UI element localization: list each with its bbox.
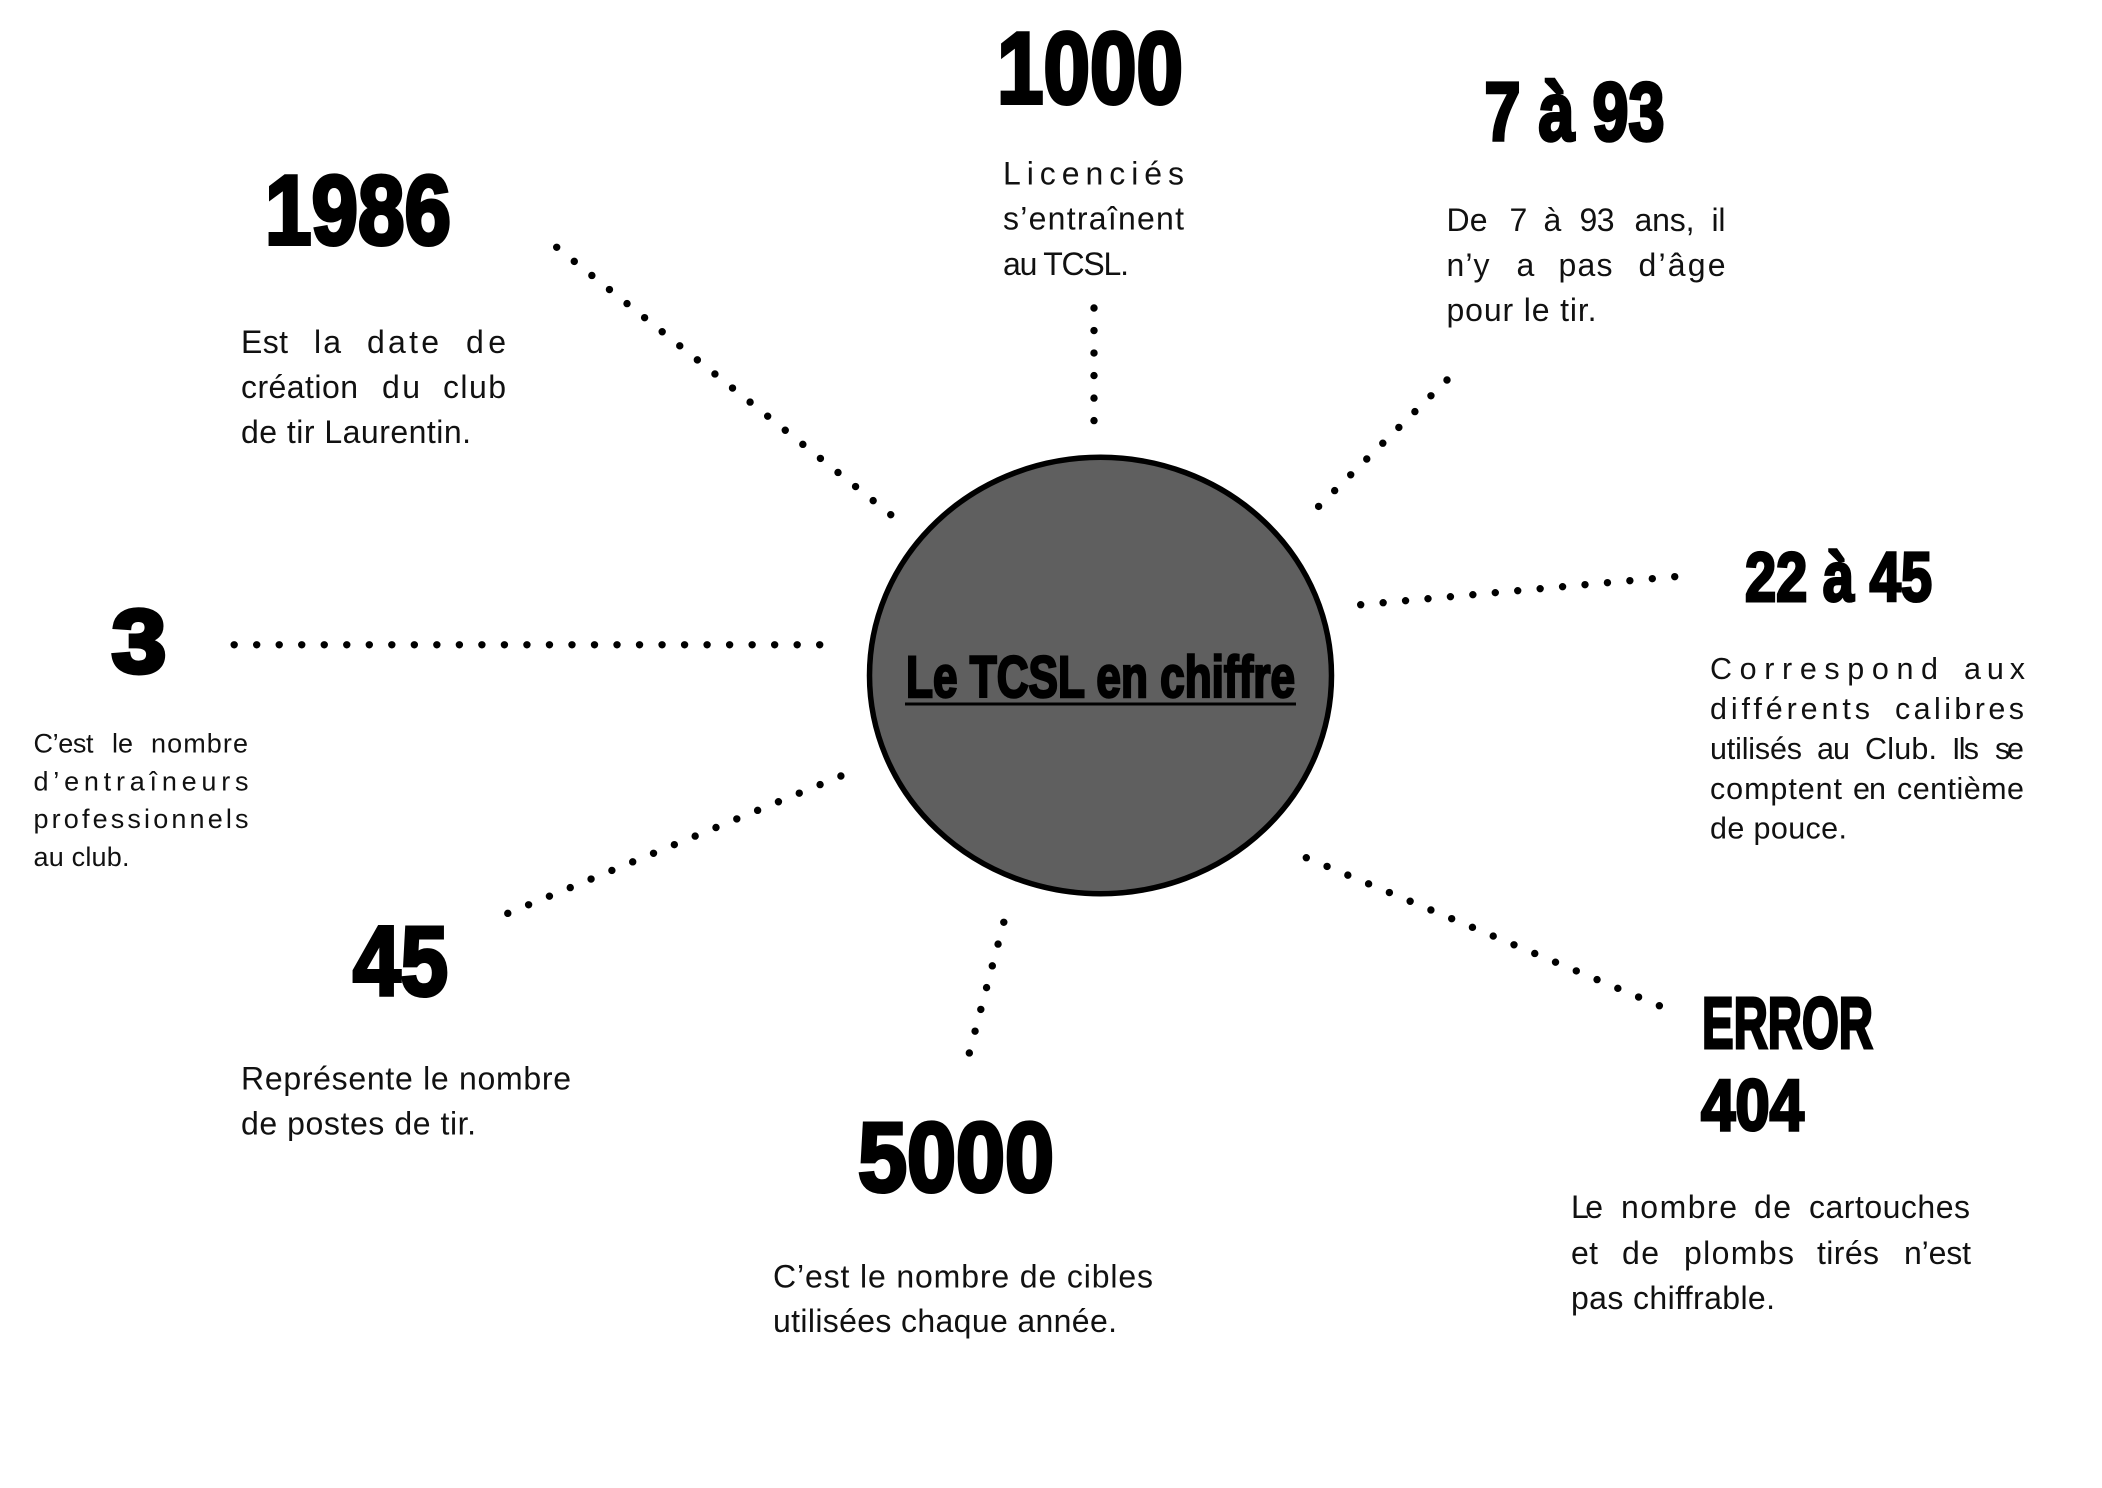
dotted line: to ERROR 404 (1306, 858, 1660, 1006)
description: ERROR 404: tirés (1817, 1235, 1879, 1271)
dotted line: to 3 (234, 641, 820, 648)
description: 7 à 93: pas (1558, 247, 1612, 283)
number: 45: 45 (353, 906, 448, 1016)
description: 7 à 93: De (1446, 202, 1488, 238)
description: 22 à 45: utilisés (1710, 732, 1802, 766)
description: ERROR 404: de (1622, 1235, 1659, 1271)
description: 1986: club (443, 369, 506, 405)
description: 7 à 93: 93 (1580, 202, 1614, 238)
description: ERROR 404: de (1754, 1189, 1791, 1225)
number: ERROR 404: 404 (1701, 1066, 1804, 1146)
description: 5000: utilisées chaque année. (773, 1303, 1117, 1339)
description: 7 à 93 (1446, 202, 1726, 328)
dotted line: to 1000 (1090, 308, 1098, 422)
block: 5000 (773, 1102, 1153, 1339)
description: ERROR 404 (1571, 1189, 1971, 1316)
description: 3: professionnels (34, 804, 248, 834)
description: 22 à 45: comptent (1710, 772, 1843, 806)
description: 1986: de tir Laurentin. (241, 414, 471, 450)
description: 22 à 45: se (1995, 732, 2024, 766)
description: 22 à 45: Club. (1865, 732, 1937, 766)
description: 7 à 93: pour le tir. (1446, 292, 1596, 328)
description: 5000 (773, 1258, 1153, 1339)
number: 3: 3 (112, 591, 166, 691)
description: 22 à 45: de pouce. (1710, 812, 1847, 846)
description: 22 à 45: en (1853, 772, 1886, 806)
description: 7 à 93: ans, (1634, 202, 1694, 238)
number: 22 à 45: 22 à 45 (1745, 538, 1932, 616)
description: 1000: s’entraînent (1003, 200, 1184, 236)
description: 1000: Licenciés (1003, 156, 1184, 192)
dotted line: to 7 à 93 (1317, 380, 1447, 508)
number: 5000: 5000 (858, 1102, 1054, 1212)
block: 1000 (997, 13, 1184, 282)
description: 22 à 45: Ils (1952, 732, 1979, 766)
description: 1986: du (382, 369, 420, 405)
description: 45 (241, 1060, 571, 1142)
description: ERROR 404: et (1571, 1235, 1598, 1271)
dotted line: to 1986 (557, 247, 892, 515)
description: 22 à 45: centième (1897, 772, 2024, 806)
description: 22 à 45: au (1817, 732, 1850, 766)
block: 45 (241, 906, 571, 1142)
description: ERROR 404: Le (1571, 1189, 1603, 1225)
number: 1000: 1000 (997, 13, 1183, 125)
number: ERROR 404 (1701, 984, 1873, 1146)
description: 1986: création (241, 369, 358, 405)
central circle with title (870, 457, 1332, 894)
description: 1986: la (314, 324, 341, 360)
description: 7 à 93: n’y (1446, 247, 1490, 283)
number: 7 à 93: 7 à 93 (1484, 65, 1664, 158)
number: ERROR 404: ERROR (1702, 984, 1873, 1064)
block: ERROR 404 (1571, 984, 1971, 1316)
number: 1986: 1986 (265, 155, 451, 265)
description: 3: C’est (34, 728, 94, 758)
description: 22 à 45 (1710, 652, 2025, 846)
circle (870, 457, 1332, 894)
description: ERROR 404: plombs (1684, 1235, 1794, 1271)
description: 3 (34, 728, 248, 872)
description: 7 à 93: à (1544, 202, 1562, 238)
description: 45: de postes de tir. (241, 1106, 476, 1142)
dotted line: to 45 (507, 776, 841, 914)
description: ERROR 404: pas chiffrable. (1571, 1280, 1775, 1316)
description: 1000 (1003, 156, 1184, 282)
block: 7 à 93 (1446, 65, 1726, 328)
dotted line: to 5000 (969, 922, 1004, 1054)
description: 1986 (241, 324, 506, 450)
description: 3: d’entraîneurs (34, 766, 248, 796)
description: 22 à 45: Correspond (1710, 652, 1938, 686)
description: 1986: de (466, 324, 506, 360)
description: 3: le (112, 728, 133, 758)
description: 7 à 93: 7 (1510, 202, 1527, 238)
description: 7 à 93: d’âge (1638, 247, 1726, 283)
block: 22 à 45 (1710, 538, 2025, 846)
description: 1986: date (367, 324, 439, 360)
description: 45: Représente le nombre (241, 1060, 571, 1096)
description: 1986: Est (241, 324, 288, 360)
description: 3: nombre (151, 728, 248, 758)
description: 7 à 93: a (1516, 247, 1534, 283)
description: 22 à 45: aux (1964, 652, 2025, 686)
description: ERROR 404: n’est (1904, 1235, 1971, 1271)
block: 1986 (241, 155, 506, 450)
description: ERROR 404: cartouches (1809, 1189, 1970, 1225)
dotted line: to 22 à 45 (1361, 577, 1676, 605)
block: 3 (34, 591, 248, 872)
description: 22 à 45: calibres (1895, 692, 2024, 726)
description: 1000: au TCSL. (1003, 246, 1129, 282)
description: 3: au club. (34, 842, 130, 872)
title: Le TCSL en chiffre: Le TCSL en chiffre (906, 645, 1295, 710)
description: 5000: C’est le nombre de cibles (773, 1258, 1153, 1294)
description: 7 à 93: il (1712, 202, 1726, 238)
description: ERROR 404: nombre (1621, 1189, 1737, 1225)
description: 22 à 45: différents (1710, 692, 1870, 726)
